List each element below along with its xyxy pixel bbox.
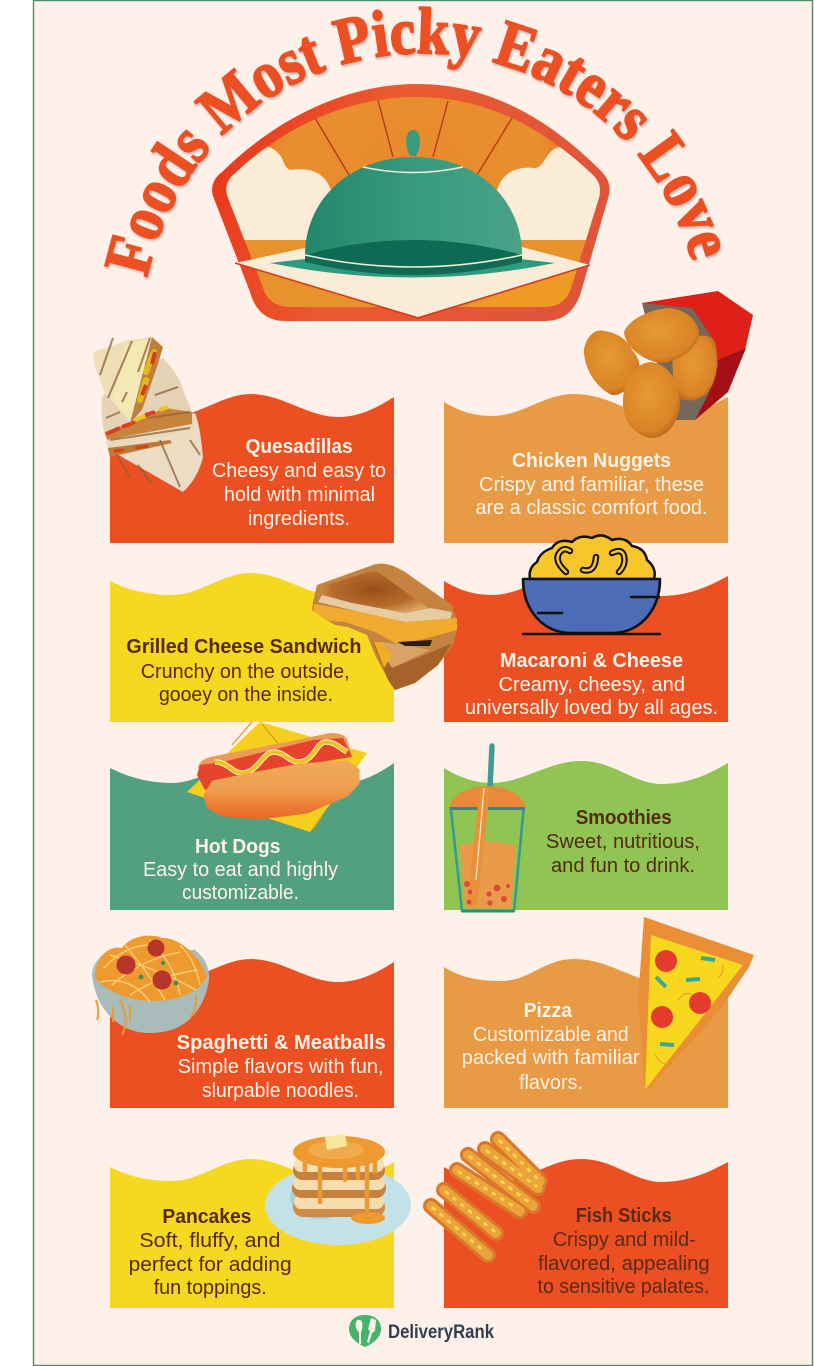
heading and description: Smoothies bbox=[576, 807, 672, 829]
heading and description bbox=[465, 650, 718, 719]
heading and description: fun toppings. bbox=[154, 1277, 267, 1299]
icon: pizza slice bbox=[638, 917, 754, 1093]
heading and description: to sensitive palates. bbox=[538, 1276, 710, 1298]
heading and description: Grilled Cheese Sandwich bbox=[126, 636, 361, 658]
panel: spaghetti and meatballs bbox=[92, 936, 394, 1108]
heading and description: hold with minimal bbox=[224, 484, 375, 506]
panel: quesadillas bbox=[93, 337, 394, 543]
icon: nuggets in red box bbox=[584, 291, 753, 438]
icon: grilled cheese sandwich bbox=[312, 564, 458, 690]
heading and description bbox=[462, 1000, 640, 1094]
card shape bbox=[444, 573, 728, 722]
heading and description: Crispy and familiar, these bbox=[479, 474, 704, 496]
icon: spaghetti bowl bbox=[92, 936, 209, 1035]
icon: pancake stack bbox=[265, 1134, 411, 1245]
card shape bbox=[444, 959, 728, 1108]
heading and description bbox=[538, 1205, 710, 1298]
icon: fish sticks bbox=[431, 1139, 540, 1255]
heading and description: Simple flavors with fun, bbox=[178, 1056, 384, 1078]
panel: pizza bbox=[444, 917, 754, 1108]
panel: smoothies bbox=[444, 746, 728, 911]
icon: serving cloche badge bbox=[210, 84, 620, 321]
heading and description: flavored, appealing bbox=[538, 1253, 710, 1275]
panel: grilled cheese sandwich bbox=[110, 573, 394, 722]
heading and description: are a classic comfort food. bbox=[476, 497, 708, 519]
heading and description bbox=[546, 807, 700, 877]
card shape bbox=[110, 959, 394, 1108]
heading and description: Crispy and mild- bbox=[553, 1229, 696, 1251]
heading and description: Spaghetti & Meatballs bbox=[177, 1032, 386, 1054]
heading and description: Pancakes bbox=[162, 1206, 251, 1228]
icon: bowl of macaroni bbox=[522, 535, 661, 634]
logo: DeliveryRank: DeliveryRank bbox=[388, 1322, 494, 1343]
card shape bbox=[444, 1159, 728, 1308]
heading and description: gooey on the inside. bbox=[159, 684, 333, 706]
logo: DeliveryRank bbox=[349, 1315, 494, 1347]
heading and description: Cheesy and easy to bbox=[212, 460, 386, 482]
heading and description: slurpable noodles. bbox=[202, 1080, 359, 1102]
heading and description: perfect for adding bbox=[129, 1254, 292, 1276]
panel: pancakes bbox=[110, 1134, 411, 1308]
icon: quesadilla bbox=[93, 337, 203, 492]
card shape bbox=[444, 394, 728, 543]
card shape bbox=[110, 1159, 394, 1308]
heading and description: Creamy, cheesy, and bbox=[498, 674, 685, 696]
heading and description bbox=[476, 450, 708, 519]
heading and description: flavors. bbox=[519, 1072, 583, 1094]
heading and description: Sweet, nutritious, bbox=[546, 831, 700, 853]
heading and description: Pizza bbox=[524, 1000, 573, 1022]
heading and description: and fun to drink. bbox=[551, 855, 695, 877]
heading and description: ingredients. bbox=[248, 508, 350, 530]
panel: macaroni and cheese bbox=[444, 535, 728, 722]
card shape bbox=[110, 573, 394, 722]
heading and description: Macaroni & Cheese bbox=[500, 650, 683, 672]
card shape bbox=[444, 761, 728, 910]
heading and description: packed with familiar bbox=[462, 1047, 640, 1069]
heading and description: universally loved by all ages. bbox=[465, 697, 718, 719]
title: Foods Most Picky Eaters Love bbox=[104, 6, 722, 280]
icon: hot dog bbox=[187, 722, 367, 832]
heading and description: Chicken Nuggets bbox=[512, 450, 671, 472]
heading and description: Quesadillas bbox=[246, 436, 353, 458]
heading and description: Hot Dogs bbox=[195, 836, 280, 858]
heading and description: Crunchy on the outside, bbox=[141, 661, 350, 683]
heading and description bbox=[126, 636, 361, 706]
panel: chicken nuggets bbox=[444, 291, 753, 543]
icon: smoothie cup bbox=[450, 746, 525, 911]
card shape bbox=[110, 394, 394, 543]
heading and description bbox=[177, 1032, 386, 1102]
panel: hot dogs bbox=[110, 722, 394, 910]
heading and description: Fish Sticks bbox=[576, 1205, 672, 1227]
heading and description: customizable. bbox=[182, 882, 299, 904]
heading and description: Soft, fluffy, and bbox=[139, 1230, 280, 1252]
card shape bbox=[110, 761, 394, 910]
heading and description: Easy to eat and highly bbox=[143, 859, 338, 881]
heading and description bbox=[212, 436, 386, 530]
heading and description bbox=[129, 1206, 292, 1299]
heading and description: Customizable and bbox=[473, 1024, 629, 1046]
panel: fish sticks bbox=[431, 1139, 728, 1308]
heading and description bbox=[143, 836, 338, 904]
